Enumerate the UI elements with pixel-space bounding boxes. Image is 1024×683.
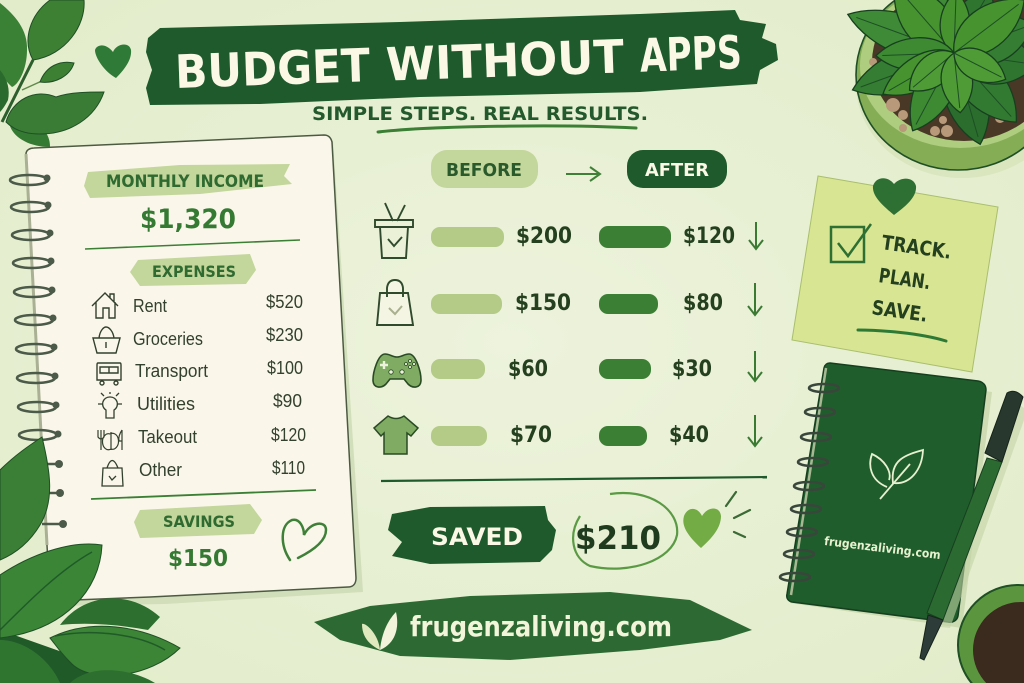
saved banner (388, 506, 556, 564)
icon: basket (93, 327, 120, 353)
note text (870, 230, 953, 327)
icon: takeout cup (375, 203, 413, 258)
notebook spiral (780, 384, 839, 581)
row: clothing (374, 415, 762, 454)
expense list: Transport (135, 361, 208, 381)
label: expenses: EXPENSES (152, 262, 236, 281)
label: expenses (130, 254, 256, 286)
row: takeout: $120 (683, 224, 735, 249)
label: savings: SAVINGS (163, 512, 235, 531)
expense list: Groceries (133, 329, 203, 349)
panel: notebook budget page (10, 135, 363, 606)
icon: bus (97, 363, 121, 380)
icon: t-shirt (374, 416, 418, 454)
pill: before: BEFORE (446, 160, 522, 181)
plant: bottom-left leaves (0, 437, 180, 683)
icon: game controller (373, 354, 421, 387)
expense list: Takeout (138, 427, 197, 447)
row: games (373, 351, 762, 387)
icon: bag (102, 460, 123, 486)
saved banner: SAVED (431, 523, 523, 551)
value: saved amount: $210 (575, 519, 661, 557)
footer banner (314, 592, 752, 660)
row: games: $60 (508, 357, 548, 382)
row: clothing: $70 (510, 423, 552, 448)
note text: TRACK. (880, 230, 953, 264)
icon: bulb (98, 392, 122, 418)
plant: potted plant top-right (841, 0, 1024, 178)
value: saved amount (573, 493, 677, 569)
footer url: frugenzaliving.com (410, 610, 672, 643)
label: monthly income: MONTHLY INCOME (106, 172, 264, 192)
row: clothing: $40 (669, 423, 709, 448)
icon: bus wheels (100, 381, 118, 385)
expense list (92, 292, 306, 486)
expense list: $110 (272, 458, 305, 478)
pill: before (431, 150, 538, 188)
label: savings (134, 504, 262, 538)
subtitle: SIMPLE STEPS. REAL RESULTS. (312, 103, 648, 125)
title: APPS (639, 25, 743, 83)
notebook url: frugenzaliving.com (824, 534, 941, 562)
sticky note (792, 176, 998, 372)
plant leaves (841, 0, 1024, 150)
pill: after: AFTER (645, 160, 709, 181)
expense list: $120 (271, 425, 306, 445)
icon: hand-drawn heart (283, 520, 326, 560)
plant: top-left leaves (0, 0, 104, 147)
icon: shopping bag (377, 280, 413, 325)
icon: leaf logo (870, 450, 923, 499)
label: monthly income (84, 164, 292, 198)
expense list: $90 (273, 391, 302, 411)
row: shopping: $80 (683, 291, 723, 316)
icon: footer leaf (362, 612, 397, 650)
icon: green heart top (95, 44, 131, 78)
closed green notebook (780, 363, 992, 628)
value: savings: $150 (168, 546, 228, 572)
value: income: $1,320 (140, 204, 236, 235)
expense list: $100 (267, 358, 303, 378)
comparison table (373, 150, 763, 454)
expense list: $230 (266, 325, 303, 345)
expense list: $520 (266, 292, 303, 312)
notebook spiral binding (10, 175, 62, 524)
note text: PLAN. (877, 263, 932, 294)
row: games: $30 (672, 357, 712, 382)
pen (920, 391, 1024, 660)
row: takeout (375, 203, 763, 258)
icon: heart with burst (683, 492, 750, 548)
rows: Rent (133, 296, 167, 316)
expense list: Other (139, 460, 182, 480)
row: shopping: $150 (515, 291, 571, 316)
title: BUDGET (174, 38, 371, 99)
row: shopping (377, 280, 762, 325)
icon: house (92, 293, 118, 318)
pill: after (627, 150, 727, 188)
arrow (566, 167, 600, 181)
icon: checkbox (831, 224, 871, 262)
row: takeout: $200 (516, 224, 572, 249)
title: WITHOUT (385, 29, 625, 92)
coffee cup (958, 585, 1024, 683)
title banner (146, 10, 778, 105)
title (174, 25, 743, 99)
expense list: Utilities (137, 394, 195, 414)
icon: cutlery (98, 430, 122, 450)
icon: heart pin (873, 178, 916, 215)
note text: SAVE. (870, 295, 929, 327)
